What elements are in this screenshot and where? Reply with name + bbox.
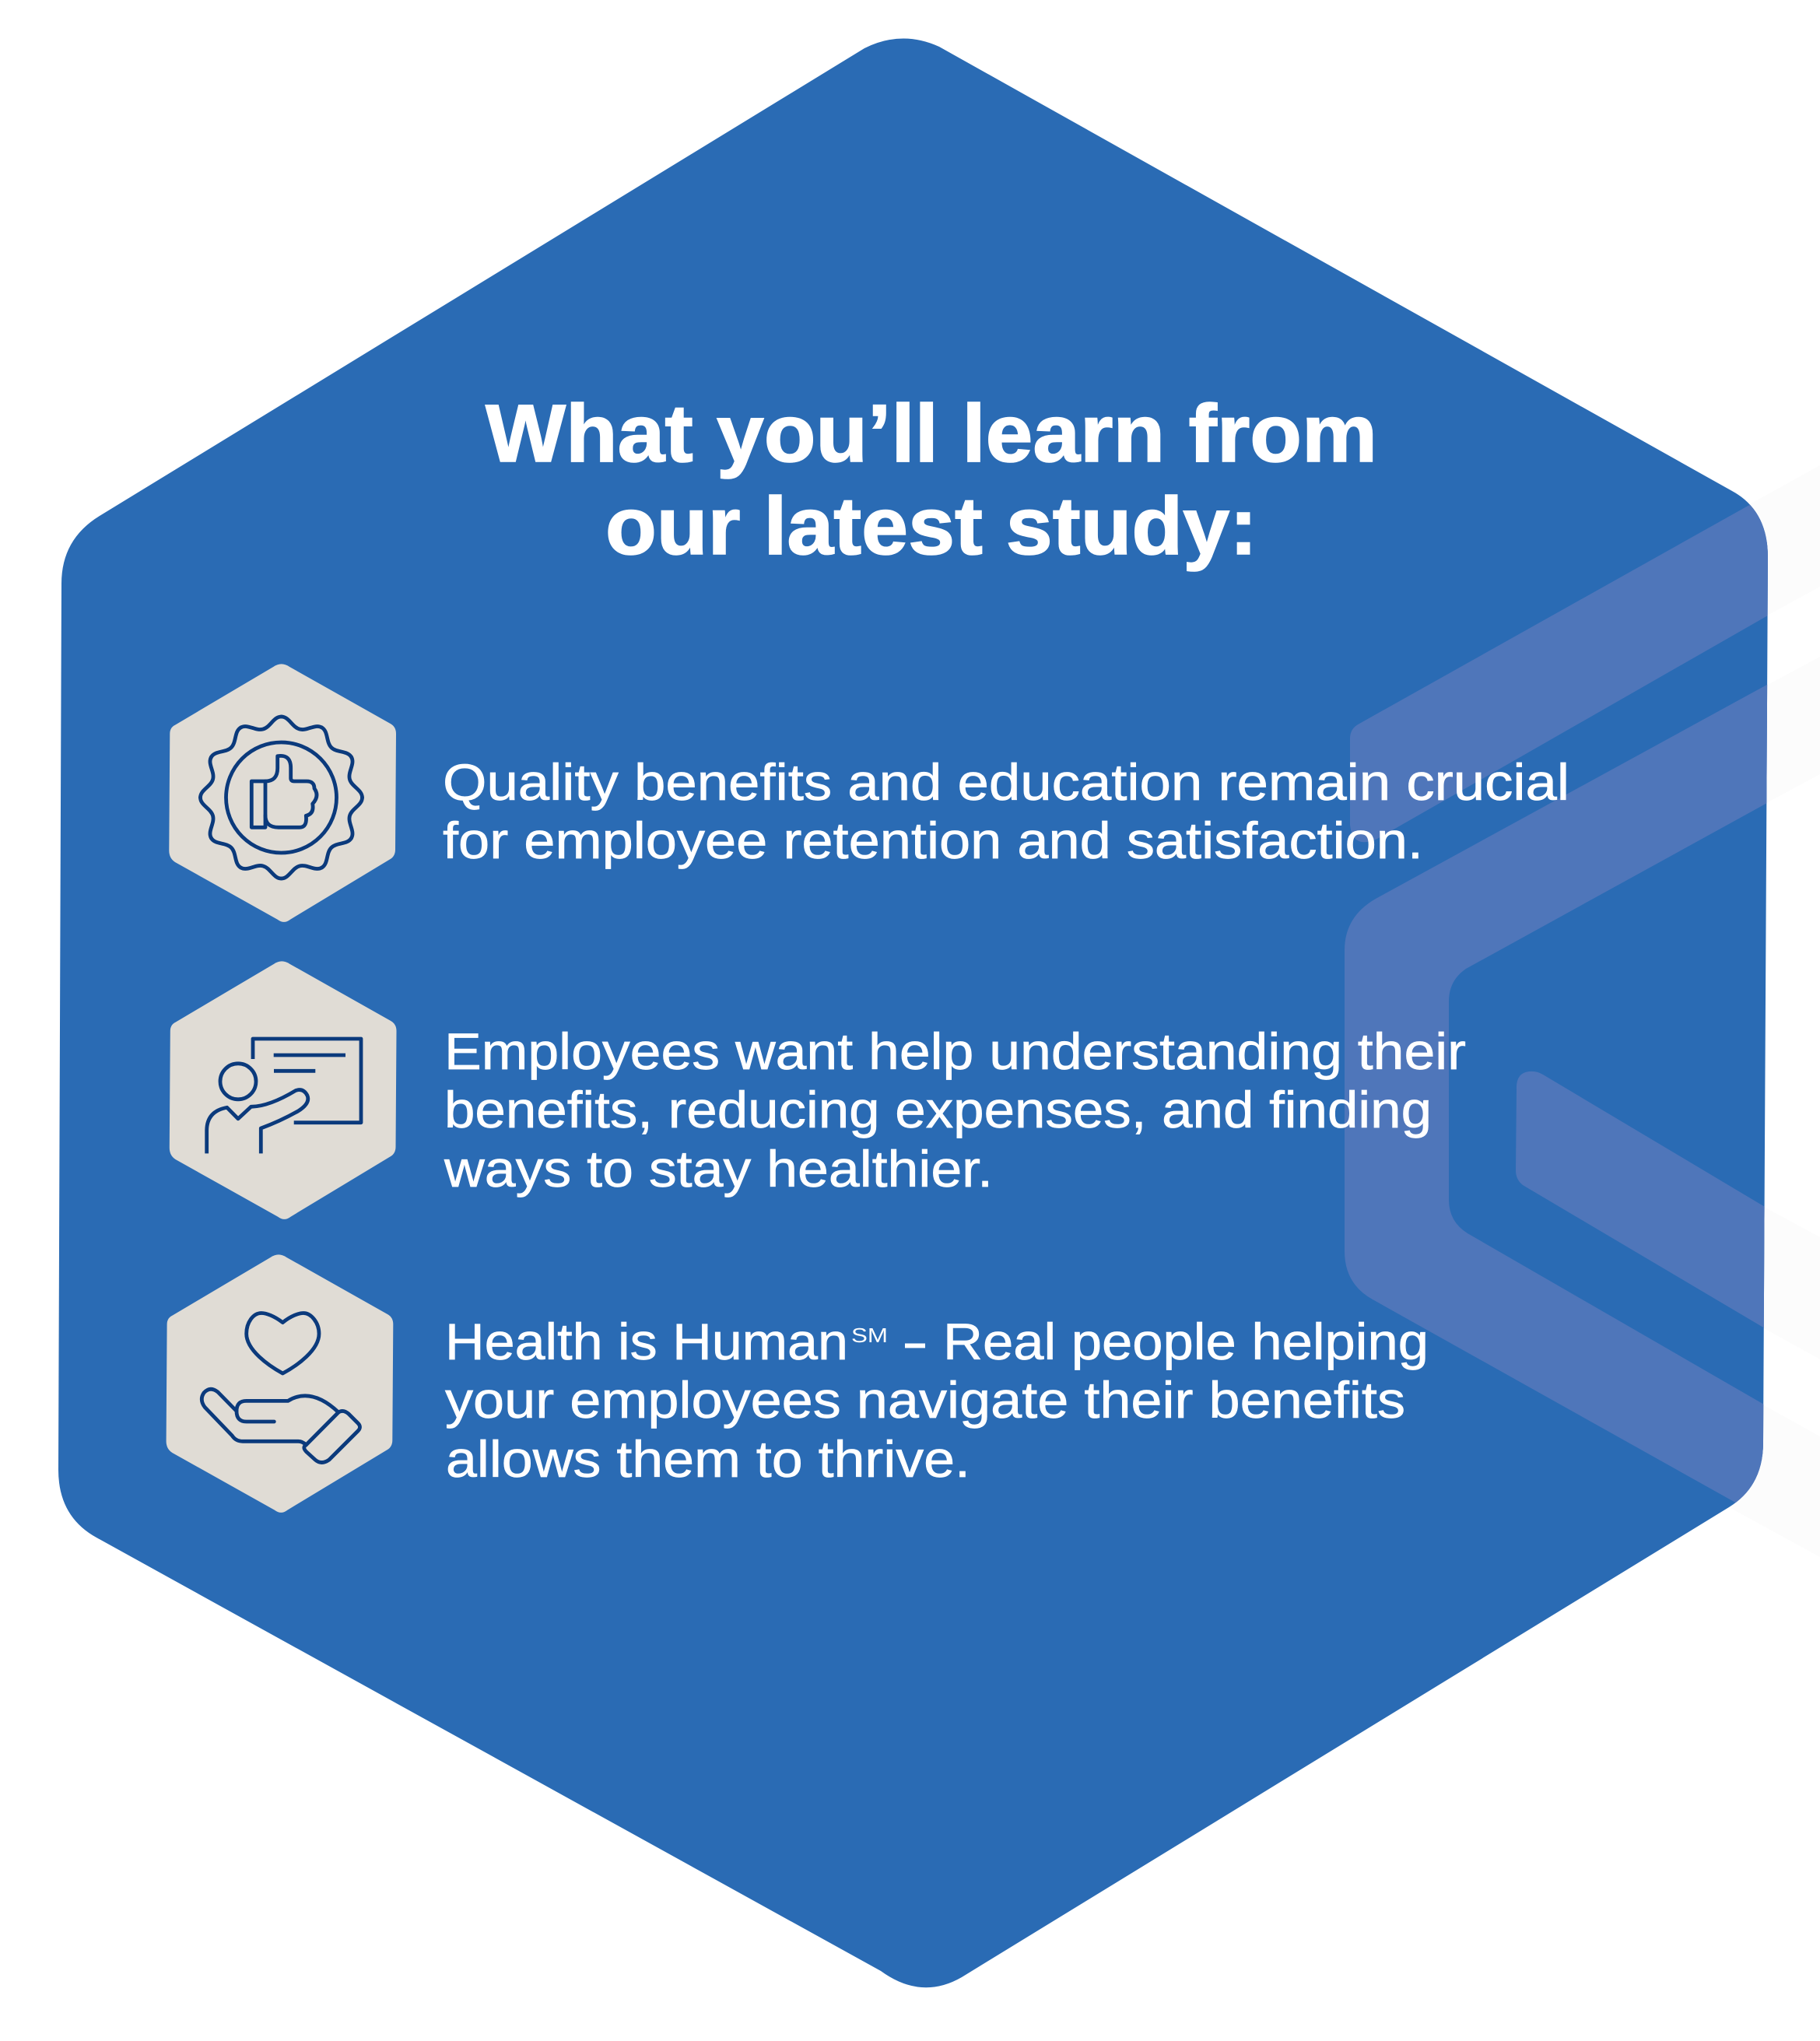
text: point two: Employees want help understanding their — [444, 1022, 1466, 1080]
icon: heart over open hand — [167, 1254, 393, 1513]
faint logo continuation outside the hexagon — [1729, 465, 1820, 1557]
text: point three — [445, 1313, 1429, 1488]
watermark logo bands — [1345, 482, 1790, 1533]
text: point two: benefits, reducing expenses, and finding — [444, 1081, 1432, 1138]
text: point two — [444, 1022, 1466, 1198]
text: point one — [443, 753, 1569, 869]
text: point three: Real people helping — [943, 1313, 1429, 1370]
text: point three: allows them to thrive. — [446, 1430, 970, 1488]
text: point three: Health is Human — [445, 1313, 848, 1370]
title: What you’ll learn from — [486, 388, 1377, 479]
text: point three: - — [902, 1313, 928, 1370]
icon: thumbs up badge — [169, 664, 396, 922]
text: point one: Quality benefits and education remain crucial — [443, 753, 1569, 811]
text: point three: your employees navigate their benefits — [445, 1371, 1405, 1429]
text: point one: for employee retention and satisfaction. — [443, 812, 1423, 869]
text: point three: SM — [851, 1324, 888, 1347]
icon: presenter at board — [170, 961, 397, 1219]
title — [486, 388, 1377, 572]
text: point two: ways to stay healthier. — [444, 1140, 993, 1198]
title: our latest study: — [605, 481, 1257, 572]
